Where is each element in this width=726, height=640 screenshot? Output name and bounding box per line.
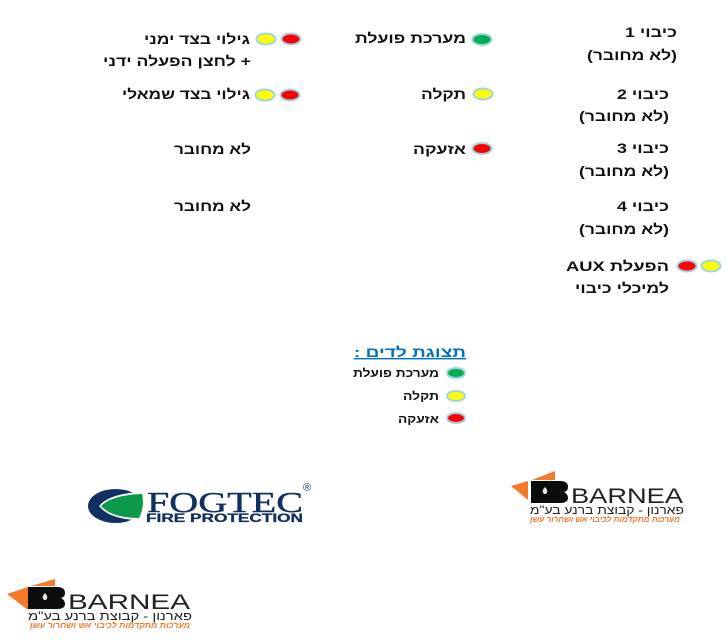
text: extinguisher 2 <box>579 86 669 124</box>
text: extinguisher 4 <box>579 198 669 237</box>
text: legend fault: תקלה <box>403 390 439 403</box>
text: extinguisher 2: (לא מחובר) <box>579 108 669 124</box>
icon: legend yellow LED <box>447 391 465 401</box>
icon: left detection yellow LED <box>256 90 274 100</box>
text: extinguisher 3: (לא מחובר) <box>579 163 669 179</box>
text: extinguisher 1: כיבוי 1 <box>625 24 677 40</box>
text: extinguisher 2: כיבוי 2 <box>617 86 669 102</box>
icon: AUX red LED <box>678 260 696 272</box>
text: not connected row 4: לא מחובר <box>174 198 251 214</box>
text: right side detection: + לחצן הפעלה ידני <box>103 53 251 69</box>
icon: green LED <box>472 34 492 45</box>
text: extinguisher 4: כיבוי 4 <box>617 198 669 214</box>
icon: right detection yellow LED <box>256 34 276 44</box>
logo: Barnea bottom left: BARNEA <box>68 591 190 614</box>
icon: right detection red LED <box>282 34 300 44</box>
text: right side detection: גילוי בצד ימני <box>144 31 250 47</box>
logo: Barnea bottom left: מערכות מתקדמות לכיבוי אש ושחרור עשן <box>29 621 190 630</box>
logo: Barnea right: פארנון - קבוצת ברנע בע"מ <box>530 503 684 517</box>
logo: Barnea bottom left <box>7 579 192 630</box>
logo: Barnea right: BARNEA <box>571 485 683 508</box>
icon: legend red LED <box>447 413 465 423</box>
text: alarm: אזעקה <box>413 141 467 157</box>
text: extinguisher 4: (לא מחובר) <box>579 221 669 237</box>
legend: LED display <box>353 344 466 426</box>
icon: AUX yellow LED <box>702 260 720 272</box>
text: AUX activation <box>566 258 669 296</box>
text: extinguisher 3 <box>579 140 669 179</box>
text: extinguisher 1 <box>587 24 677 63</box>
logo: Barnea right <box>511 471 684 524</box>
text: extinguisher 1: (לא מחובר) <box>587 47 677 63</box>
logo: Fogtec: ® <box>303 482 311 494</box>
text: right side detection <box>103 31 251 69</box>
icon: yellow LED <box>474 88 492 100</box>
logo: Fogtec: FOGTEC <box>147 487 303 519</box>
logo: Fogtec: FIRE PROTECTION <box>146 513 303 525</box>
heading: LED display: תצוגת לדים : <box>354 344 466 360</box>
text: not connected row 3: לא מחובר <box>174 141 251 157</box>
text: legend alarm: אזעקה <box>398 414 439 426</box>
text: extinguisher 3: כיבוי 3 <box>617 140 669 156</box>
text: AUX activation: הפעלת AUX <box>566 258 669 274</box>
text: fault: תקלה <box>421 86 466 102</box>
icon: left detection red LED <box>280 90 300 100</box>
text: system active: מערכת פועלת <box>355 30 466 46</box>
icon: red LED <box>472 143 492 154</box>
panel: extinguisher rows <box>103 24 720 296</box>
text: left side detection: גילוי בצד שמאלי <box>122 86 250 102</box>
text: legend system active: מערכת פועלת <box>353 367 439 380</box>
logo: Barnea right: מערכות מתקדמות לכיבוי אש ושחרור עשן <box>529 515 680 524</box>
icon: legend green LED <box>447 368 465 378</box>
text: AUX activation: למיכלי כיבוי <box>575 280 669 296</box>
logo: Fogtec <box>88 482 311 525</box>
logo: Barnea bottom left: פארנון - קבוצת ברנע בע"מ <box>28 609 192 623</box>
